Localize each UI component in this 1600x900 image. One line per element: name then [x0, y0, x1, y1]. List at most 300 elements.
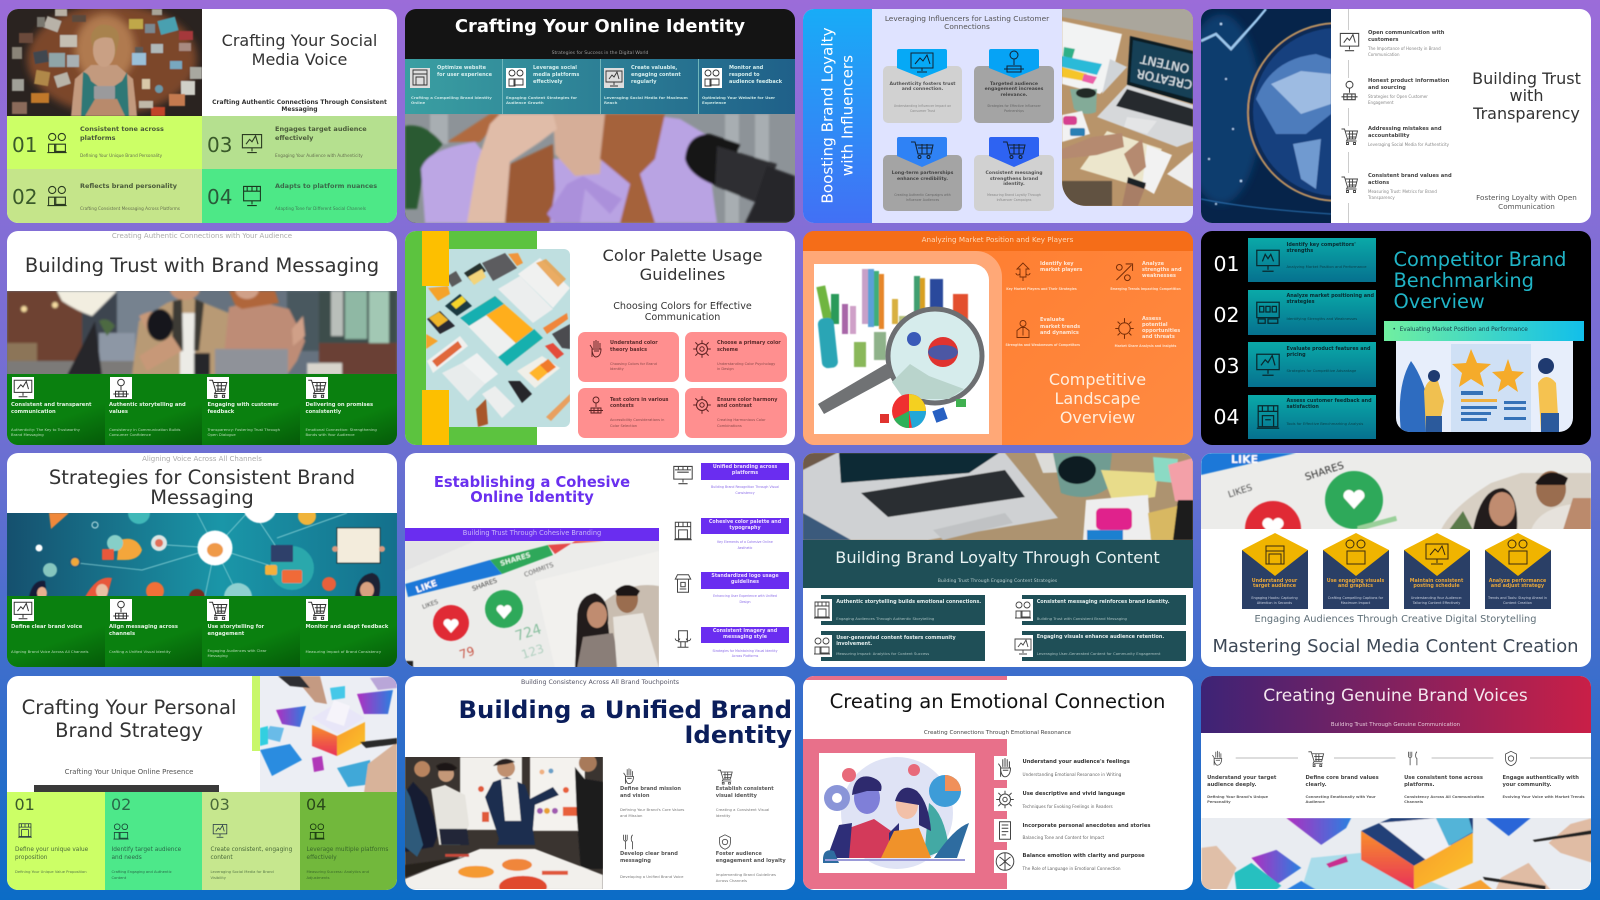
note: Bonds with Your Audience — [306, 432, 355, 437]
note: Crafting Consistent Messaging Across Platforms — [80, 206, 180, 210]
icon — [1112, 317, 1136, 340]
photo: couple with camera — [7, 291, 397, 374]
lime strip — [252, 676, 260, 751]
note: Open Dialogue — [208, 432, 236, 437]
note — [1484, 596, 1550, 606]
title: Competitive — [1049, 370, 1146, 389]
note: Engaging Audiences Through Authentic Storytelling — [836, 616, 934, 621]
icon — [306, 822, 326, 841]
icon — [1341, 80, 1358, 100]
note — [208, 648, 267, 658]
icon — [210, 822, 230, 839]
note: Crafting a Compelling Brand Identity — [411, 95, 492, 100]
label — [729, 64, 782, 84]
title: Guidelines — [640, 265, 725, 284]
label — [306, 846, 388, 862]
note — [702, 95, 776, 105]
item 1 — [1010, 260, 1090, 294]
note: Measuring Brand Loyalty Through — [987, 193, 1041, 197]
label: visual identity — [716, 793, 757, 799]
note — [701, 594, 789, 605]
col 03 — [202, 792, 300, 890]
step 2 — [503, 58, 601, 114]
note: Transparency — [1368, 195, 1395, 200]
item 3 — [1010, 316, 1090, 352]
label — [716, 786, 774, 800]
photo: content creator laptop: CREATOR — [1135, 66, 1192, 91]
connector lines — [1200, 756, 1590, 760]
icon — [1338, 126, 1360, 146]
panel: Color Palette Usage Guidelines — [405, 231, 795, 445]
subtitle bar — [1384, 320, 1584, 341]
note: Defining Your Brand's Core Values — [620, 807, 684, 812]
note: The Role of Language in Emotional Connection — [1022, 866, 1121, 870]
label: Ensure color harmony — [717, 396, 777, 402]
note — [717, 362, 775, 372]
label: Identify key competitors' — [1286, 242, 1356, 248]
label — [984, 82, 1044, 98]
label: market players — [1040, 267, 1082, 273]
illustration: two people — [819, 753, 975, 873]
photo: social analytics: SHARES — [499, 551, 532, 568]
note — [894, 193, 951, 202]
label — [1404, 578, 1470, 590]
card 2 — [685, 332, 787, 382]
note: Building Trust with Consistent Brand Messaging — [1037, 616, 1127, 621]
note: Crafting Engaging and Authentic — [112, 870, 172, 874]
subtitle — [1460, 194, 1594, 211]
note — [1306, 795, 1376, 806]
icon — [111, 822, 131, 841]
note — [987, 104, 1041, 112]
label — [610, 396, 668, 410]
row 3 — [1248, 342, 1376, 387]
label: Open communication with — [1368, 30, 1444, 36]
label: proposition — [15, 854, 47, 860]
title — [222, 30, 377, 68]
note — [1322, 596, 1388, 606]
icon — [702, 68, 722, 88]
icon — [716, 766, 734, 786]
label — [533, 64, 580, 84]
title: with — [1510, 86, 1543, 105]
item 3 — [820, 631, 985, 661]
subtitle: Fostering Loyalty with Open — [1476, 193, 1577, 202]
label — [15, 846, 88, 862]
panel: Competitor Brand Benchmarking Overview — [1200, 231, 1590, 445]
note: Leveraging User-Generated Content for Community Engagement — [1037, 651, 1160, 656]
item 1 — [820, 595, 985, 625]
item 4 — [1022, 631, 1186, 661]
icon — [672, 627, 694, 650]
icon — [691, 394, 713, 416]
label: potential — [1142, 322, 1168, 328]
label: Maintain consistent — [1410, 578, 1463, 584]
icon — [306, 377, 328, 399]
photo: social analytics: 724 — [513, 621, 544, 644]
note: Color Selection — [610, 424, 637, 428]
label: Authentic storytelling and — [109, 402, 186, 408]
col 04 — [300, 792, 397, 890]
label — [631, 64, 681, 84]
note — [11, 426, 80, 438]
title: Identity — [684, 720, 792, 749]
note: Understanding Color Psychology — [717, 362, 775, 366]
note: Communication — [1368, 52, 1400, 57]
panel: Crafting Your Online Identity — [405, 8, 795, 222]
photo: isometric brand box — [260, 676, 397, 792]
label: posting schedule — [1413, 584, 1460, 589]
label: Standardized logo usage — [711, 574, 779, 579]
note: Brand Messaging — [11, 432, 44, 437]
label — [1142, 261, 1182, 280]
number: 04 — [306, 795, 326, 814]
label: Analyze market positioning and — [1286, 293, 1374, 299]
note: Identity — [610, 367, 624, 371]
note: Audience Growth — [506, 100, 544, 105]
col 2 — [104, 374, 202, 445]
subtitle — [885, 14, 1050, 31]
teal strip — [405, 58, 795, 114]
badge 1 — [897, 49, 947, 78]
label: Monitor and adapt feedback — [306, 624, 388, 630]
item 1 — [994, 756, 1189, 780]
note: Leveraging Social Media for Authenticity — [1368, 142, 1449, 147]
label — [1368, 30, 1444, 42]
note: Measuring Trust: Metrics for Brand — [1368, 189, 1437, 194]
title: Mastering Social Media Content Creation — [1212, 636, 1579, 656]
note: Creating Authentic Campaigns with — [894, 193, 951, 197]
note — [701, 540, 789, 551]
number 02: 02 — [1213, 302, 1240, 326]
note: Evolving Your Voice with Market Trends — [1502, 795, 1585, 799]
label: Leverage multiple platforms — [306, 846, 388, 852]
label: Unified branding across — [713, 465, 777, 470]
note: Strengths and Weaknesses of Competitors — [1006, 343, 1080, 347]
panel: Building Trust with Transparency — [1200, 8, 1590, 222]
label: Reflects brand personality — [80, 182, 177, 190]
note — [716, 872, 776, 883]
label — [610, 340, 658, 353]
icon — [12, 377, 34, 399]
note: Strategies for Open Customer — [1368, 94, 1428, 98]
title — [570, 247, 795, 285]
icon — [994, 850, 1016, 873]
title: Overview — [1394, 290, 1485, 313]
label: effectively — [306, 854, 337, 860]
label: pricing — [1286, 352, 1306, 358]
label: Monitor and — [729, 64, 763, 70]
badge 2 — [989, 49, 1039, 78]
note: The Importance of Honesty in Brand — [1368, 46, 1441, 50]
title: Crafting Your Personal — [22, 696, 236, 718]
photo: flat-lay palette — [426, 249, 570, 427]
icon — [306, 599, 328, 621]
number 03: 03 — [1213, 354, 1240, 378]
label: strategies — [1286, 299, 1315, 305]
label: Consistent imagery and — [713, 629, 777, 634]
note — [1242, 596, 1308, 606]
card 3 text — [1404, 575, 1470, 609]
note: Market Share Analysis and Insights — [1115, 344, 1176, 348]
label: Understand your target — [1207, 775, 1276, 781]
note: Engaging Hooks: Capturing — [1251, 596, 1298, 600]
panel: Creating Genuine Brand Voices — [1200, 676, 1590, 890]
label: Define your unique value — [15, 846, 88, 852]
label — [1286, 242, 1356, 254]
icon — [672, 572, 694, 595]
label: consistently — [306, 409, 341, 415]
label: and vision — [620, 793, 649, 799]
note: Aligning Brand Voice Across All Channels — [11, 649, 88, 654]
note — [306, 870, 369, 882]
purple bar — [405, 528, 659, 541]
panel: Competitive Landscape Overview — [802, 231, 1192, 445]
pink top strip — [802, 676, 1006, 680]
label: Choose a primary color — [717, 340, 781, 346]
timeline line — [1348, 8, 1349, 222]
rotated title — [818, 27, 856, 203]
label — [1502, 775, 1579, 789]
number: 03 — [210, 795, 230, 814]
note — [717, 418, 766, 429]
note: Measuring Impact: Analytics for Content Success — [836, 651, 929, 656]
note: Audience — [1306, 800, 1325, 804]
note: Accessibility Considerations in — [610, 418, 664, 422]
icon — [1254, 350, 1282, 378]
note: Influencer Audiences — [906, 198, 939, 202]
item 4 — [716, 832, 795, 886]
item 03 — [202, 116, 397, 168]
note: Strategies for Competitive Advantage — [1286, 369, 1356, 373]
card 2 text — [1322, 575, 1388, 609]
icon — [620, 766, 638, 786]
note: Design — [739, 600, 750, 604]
note: Identifying Strengths and Weaknesses — [1286, 317, 1357, 321]
label: Authenticity fosters trust — [890, 82, 956, 86]
label: Use consistent tone across — [1404, 775, 1483, 781]
panel: Building Trust with Brand Messaging — [7, 231, 397, 445]
dark bar — [34, 784, 219, 792]
card 1 — [578, 332, 678, 382]
label: contexts — [610, 403, 634, 409]
note — [208, 426, 280, 438]
label — [985, 170, 1043, 187]
label: effectively — [533, 78, 563, 84]
note: Strategies for Effective Influencer — [987, 104, 1041, 108]
title: Transparency — [1473, 104, 1580, 123]
eyebrow: Aligning Voice Across All Channels — [142, 454, 262, 462]
label: regularly — [631, 78, 657, 84]
note: Maximum Impact — [1341, 601, 1370, 605]
number: 04 — [207, 184, 232, 208]
panel: Establishing a Cohesive Online Identity — [405, 453, 795, 667]
label: engaging content — [631, 72, 681, 78]
item 2 — [1336, 78, 1456, 108]
title: Brand Strategy — [55, 718, 203, 742]
col 1 — [7, 374, 104, 445]
label: weaknesses — [1142, 273, 1176, 279]
label: Consistent and transparent — [11, 402, 92, 408]
icon — [1254, 298, 1282, 326]
label — [208, 624, 264, 638]
label — [620, 851, 678, 865]
label: Authentic storytelling builds emotional connections. — [836, 599, 981, 605]
label: and threats — [1142, 334, 1175, 340]
item 01 — [7, 116, 202, 168]
label — [112, 846, 181, 862]
number: 01 — [14, 795, 35, 814]
badge 4 — [989, 137, 1039, 167]
label: Engage authentically with — [1502, 775, 1579, 781]
note: Choosing Colors for Brand — [610, 362, 657, 366]
label: and contrast — [717, 403, 752, 409]
label: Establish consistent — [716, 786, 774, 792]
step 1 — [405, 58, 503, 114]
note: Influencer Campaigns — [997, 198, 1031, 202]
note: in Design — [717, 367, 734, 371]
label — [1142, 317, 1180, 341]
label — [208, 402, 279, 416]
subtitle: Leveraging Influencers for Lasting Customer — [885, 14, 1049, 22]
label: clearly. — [1306, 782, 1327, 788]
note: Transparency: Fostering Trust Through — [208, 426, 280, 432]
label — [892, 170, 954, 182]
icon — [207, 599, 229, 621]
label: involvement. — [836, 641, 872, 647]
note — [112, 870, 172, 882]
subtitle — [212, 99, 387, 113]
badge 3 — [897, 137, 947, 167]
number 01: 01 — [1213, 252, 1240, 276]
col 4 — [300, 596, 397, 667]
label: Engaging with customer — [208, 402, 279, 408]
label: Understand your audience's feelings — [1022, 759, 1130, 765]
note: Aesthetic — [738, 546, 752, 550]
row 1 — [1248, 238, 1376, 282]
note: Personality — [1207, 800, 1231, 804]
icon — [812, 599, 832, 621]
label: content — [210, 854, 233, 860]
number: 03 — [207, 132, 232, 156]
number: 01 — [12, 132, 37, 156]
label: and dynamics — [1040, 330, 1079, 336]
label: media platforms — [533, 72, 579, 78]
photo: social analytics close-up: LIKE — [1231, 453, 1258, 466]
note: Reach — [604, 100, 617, 105]
step 3 — [1404, 748, 1494, 808]
label — [1040, 261, 1082, 273]
note — [1368, 46, 1441, 57]
note: Across Platforms — [732, 654, 758, 658]
label: and needs — [112, 854, 142, 860]
panel: Building a Unified Brand Identity — [405, 676, 795, 890]
subtitle: Messaging — [281, 106, 318, 113]
subtitle: Building Trust Through Engaging Content Strategies — [938, 579, 1057, 584]
note: Attention in Seconds — [1257, 601, 1292, 605]
note: Combinations — [717, 424, 742, 428]
note: Engaging Your Audience with Authenticity — [275, 152, 363, 158]
icon — [1502, 748, 1520, 768]
label: Balance emotion with clarity and purpose — [1022, 853, 1145, 859]
note: Adapting Tone for Different Social Channels — [275, 206, 366, 210]
item 4 — [974, 155, 1054, 211]
note: Creating Harmonious Color — [717, 418, 766, 422]
icon — [506, 68, 526, 88]
item 4 — [994, 850, 1189, 873]
label: market trends — [1040, 324, 1080, 330]
rotated title: Boosting Brand Loyalty — [818, 27, 836, 203]
label — [701, 627, 789, 643]
green feature band — [7, 374, 397, 445]
subtitle: Crafting Authentic Connections Through Consistent — [212, 99, 387, 106]
note: Measuring Impact of Brand Consistency — [306, 649, 381, 654]
title: Overview — [1060, 408, 1135, 427]
note: Consistency Across All Communication — [1404, 795, 1484, 799]
label: Targeted audience — [990, 82, 1038, 86]
photo: social analytics: LIKE — [415, 579, 439, 596]
card 1 text — [1242, 575, 1308, 609]
label: target audience — [1253, 584, 1296, 589]
note — [716, 807, 769, 818]
note — [1368, 94, 1428, 106]
item 1 — [671, 463, 789, 501]
label: Adapts to platform nuances — [275, 182, 377, 190]
note: Across Channels — [716, 878, 747, 882]
label: Understand your — [1252, 578, 1297, 584]
photo: content creator laptop — [1062, 9, 1193, 206]
label: and graphics — [1338, 584, 1373, 589]
item 3 — [994, 819, 1189, 842]
label: Addressing mistakes and — [1368, 126, 1442, 132]
label: Use descriptive and vivid language — [1022, 790, 1125, 796]
photo: social analytics: 79 — [458, 644, 476, 662]
note: Defining Your Unique Brand Personality — [80, 152, 162, 158]
label — [620, 786, 681, 800]
note: Understanding Your Audience: — [1411, 596, 1462, 600]
label — [437, 64, 492, 78]
title: Color Palette Usage — [602, 246, 762, 265]
icon — [1012, 599, 1032, 621]
note: Developing a Unified Brand Voice — [620, 874, 683, 878]
col 1 — [7, 596, 104, 667]
label: Incorporate personal anecdotes and stories — [1022, 822, 1150, 828]
label: messaging — [620, 858, 651, 864]
note: Trends and Tools: Staying Ahead in — [1488, 596, 1547, 600]
label — [306, 402, 373, 416]
note: Engaging Content Strategies for — [506, 95, 577, 100]
label — [275, 125, 367, 142]
subtitle: Crafting Your Unique Online Presence — [65, 768, 193, 776]
note: Messaging — [208, 653, 228, 658]
label — [701, 572, 789, 589]
icon — [242, 134, 262, 154]
title: Building Brand Loyalty Through Content — [835, 548, 1160, 566]
label — [1484, 578, 1550, 590]
title: Creating an Emotional Connection — [830, 690, 1165, 713]
title — [7, 696, 251, 742]
col 4 — [300, 374, 397, 445]
icon — [604, 68, 624, 88]
label: communication — [11, 409, 56, 415]
note — [1404, 795, 1484, 806]
title — [1460, 70, 1594, 122]
note: and Mission — [620, 812, 642, 818]
title — [459, 697, 792, 747]
item 4 — [1336, 173, 1456, 203]
label — [11, 402, 92, 416]
title: Crafting Your Online Identity — [455, 16, 745, 37]
